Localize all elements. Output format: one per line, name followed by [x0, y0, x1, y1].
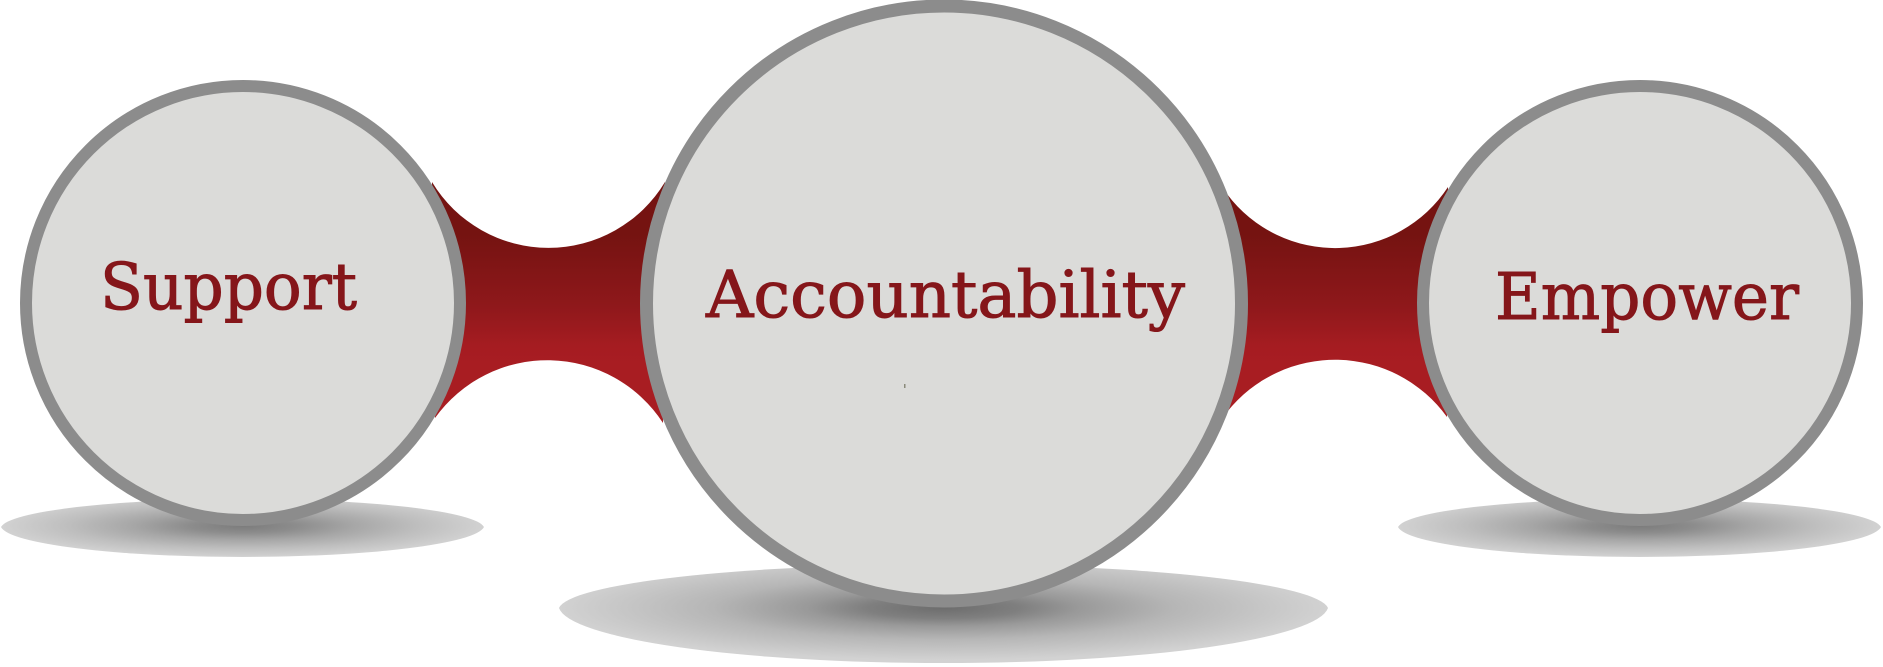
label: Support: Support	[100, 250, 357, 325]
shadow: center circle	[559, 564, 1328, 663]
connector: left red link	[432, 182, 665, 423]
label: Accountability: Accountability	[705, 258, 1185, 333]
panel: Empower circle	[1423, 86, 1857, 520]
shadow: left circle	[1, 499, 484, 557]
label: Empower: Empower	[1495, 260, 1800, 335]
shadow: right circle	[1398, 499, 1881, 557]
connector: right red link	[1227, 187, 1448, 417]
panel: Accountability circle	[646, 6, 1242, 601]
speck mark	[904, 384, 906, 388]
panel: Support circle	[26, 86, 460, 520]
